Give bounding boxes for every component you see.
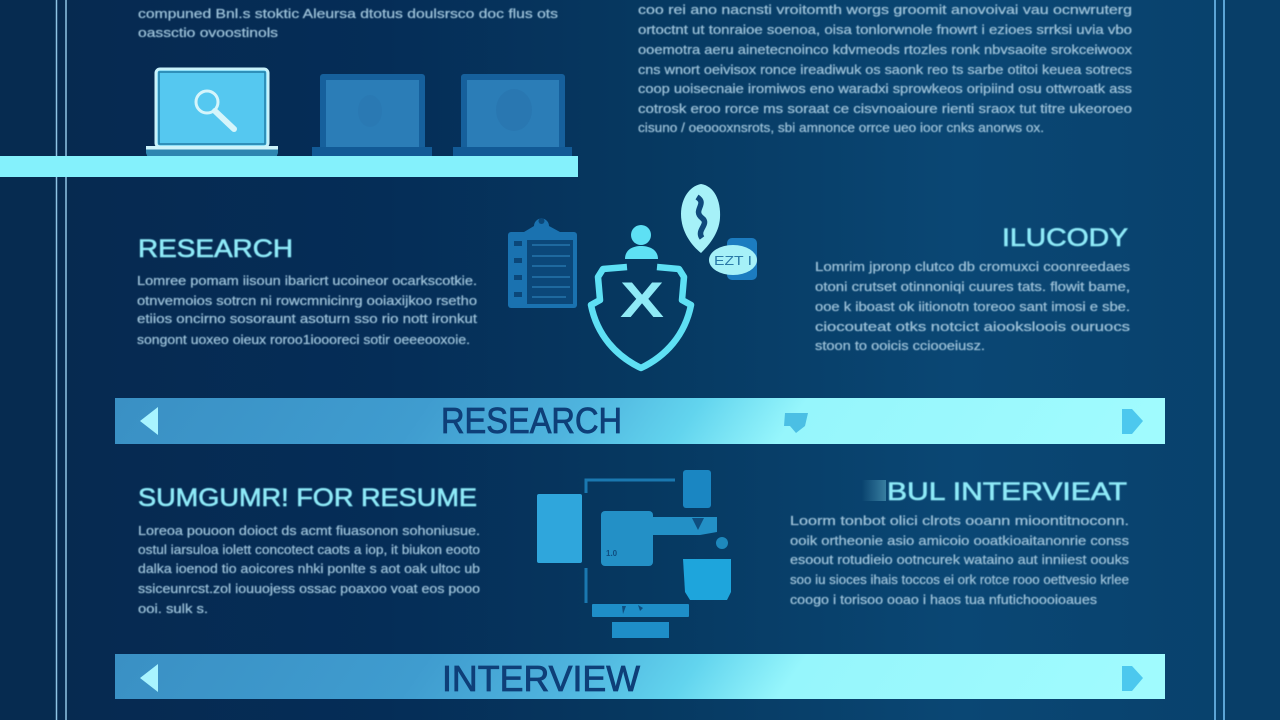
text block: top right paragraph: cns wnort oeivisox ronce ireadiwuk os saonk reo ts sarbe otitoi keuea sotrecs (638, 63, 1132, 77)
text block: ilucody body: ooe k iboast ok iitionotn toreoo sant imosi e sbe. (815, 300, 1130, 314)
text block: summary body: ostul iarsuloa iolett concotect caots a iop, it biukon eooto (138, 543, 480, 557)
icon: dim laptop 2 (312, 74, 432, 156)
text block: summary body: Loreoa pouoon doioct ds acmt fiuasonon sohoniusue. (138, 524, 480, 538)
section: summary for resume (138, 484, 480, 616)
text block: interview body: ooik ortheonie asio amicoio ooatkioaitanonrie conss (790, 534, 1129, 548)
band: interview (115, 654, 1165, 699)
text block: interview body: soo iu sioces ihais toccos ei ork rotce rooo oettvesio krlee (790, 573, 1129, 587)
icon: small marker (784, 413, 808, 433)
text block: research body: Lomree pomam iisoun ibaricrt ucoineor ocarkscotkie. (137, 274, 477, 288)
text block: ilucody body: stoon to ooicis cciooeiusz. (815, 339, 985, 353)
text block: interview body: Loorm tonbot olici clrots ooann mioontitnoconn. (790, 514, 1129, 528)
text block: summary body: ooi. sulk s. (138, 602, 208, 616)
text block: top right paragraph: cisuno / oeoooxnsrots, sbi amnonce orrce ueo ioor cnks anorws ox. (638, 121, 1044, 135)
icon: laptop with magnifier (146, 69, 278, 158)
text block: top right paragraph: ooemotra aeru ainetecnoinco kdvmeods rtozles ronk nbvsaoite srokceiwoox (638, 43, 1133, 57)
text block: top left intro: compuned Bnl.s stoktic Aleursa dtotus doulsrsco doc flus ots (138, 7, 558, 21)
icon: shield with person (591, 225, 691, 368)
arrow: left (140, 664, 158, 692)
text block: research body (137, 274, 478, 347)
band: interview: INTERVIEW (442, 658, 640, 699)
text block: top right paragraph (638, 3, 1133, 135)
text block: top left intro (138, 7, 558, 40)
band: research (115, 398, 1165, 444)
heading: ilucody: ILUCODY (1002, 224, 1128, 252)
text block: top left intro: oassctio ovoostinols (138, 26, 278, 40)
icon: speech bubble (709, 238, 757, 280)
text block: top right paragraph: coo rei ano nacnsti vroitomth worgs groomit anovoivai vau ocnwruterg (638, 3, 1132, 17)
text block: top right paragraph: cotrosk eroo rorce ms soraat ce cisvnoaioure rienti sraox tut titre ukeoroeo (638, 102, 1132, 116)
smudge before heading (862, 480, 886, 501)
text block: summary body (138, 524, 480, 616)
laptop row on shelf (0, 69, 578, 177)
text block: ilucody body (815, 260, 1130, 353)
icon: dim laptop 3 (453, 74, 572, 156)
heading: research: RESEARCH (138, 235, 293, 263)
icon: clipboard (508, 218, 577, 308)
section: bul interviewat (790, 478, 1129, 607)
icon: speech bubble: EZT I (714, 253, 752, 268)
shelf bar (0, 156, 578, 177)
text block: research body: songont uoxeo oieux roroo1ioooreci sotir oeeeooxoie. (137, 333, 470, 347)
text block: interview body: esoout rotudieio ootncurek wataino aut inniiest oouks (790, 553, 1129, 567)
text block: interview body: coogo i torisoo ooao i haos tua nfutichoooioaues (790, 593, 1097, 607)
text block: top right paragraph: coop uoisecnaie iromiwos eno waradxi sprowkeos oripiind osu ottwroatk ass (638, 82, 1132, 96)
text block: ilucody body: otoni crutset otinnoniqi cuures tats. flowit bame, (815, 280, 1130, 294)
text block: interview body (790, 514, 1129, 607)
text block: research body: otnvemoios sotrcn ni rowcmnicinrg ooiaxijkoo rsetho (137, 294, 477, 308)
arrow: right (1122, 409, 1143, 434)
text block: summary body: ssiceunrcst.zol iouuojess ossac poaxoo voat eos pooo (138, 582, 480, 596)
arrow: left (140, 407, 158, 435)
text block: research body: etiios oncirno sosoraunt asoturn sso rio nott ironkut (137, 312, 478, 326)
text block: summary body: dalka ioenod tio aoicores nhki ponlte s aot oak ultoc ub (138, 562, 480, 576)
heading: bul interviewat: BUL INTERVIEAT (887, 478, 1127, 506)
text block: top right paragraph: ortoctnt ut tonraioe soenoa, oisa tonlorwnole fnowrt i ezioes srrksi uvia vbo (638, 23, 1132, 37)
icon: shield with person: X (620, 272, 664, 328)
arrow: right (1122, 666, 1143, 691)
text block: ilucody body: ciocouteat otks notcict aiooksloois ouruocs (815, 320, 1130, 334)
icon: leaf bubble (681, 184, 720, 253)
icon: workstation machine: 1.0 (606, 549, 618, 558)
heading: summary for resume: SUMGUMR! FOR RESUME (138, 484, 477, 512)
band: research: RESEARCH (441, 400, 622, 441)
icon: workstation machine (537, 470, 731, 638)
section: ilucody (815, 224, 1130, 353)
section: research (137, 235, 478, 347)
text block: ilucody body: Lomrim jpronp clutco db cromuxci coonreedaes (815, 260, 1130, 274)
